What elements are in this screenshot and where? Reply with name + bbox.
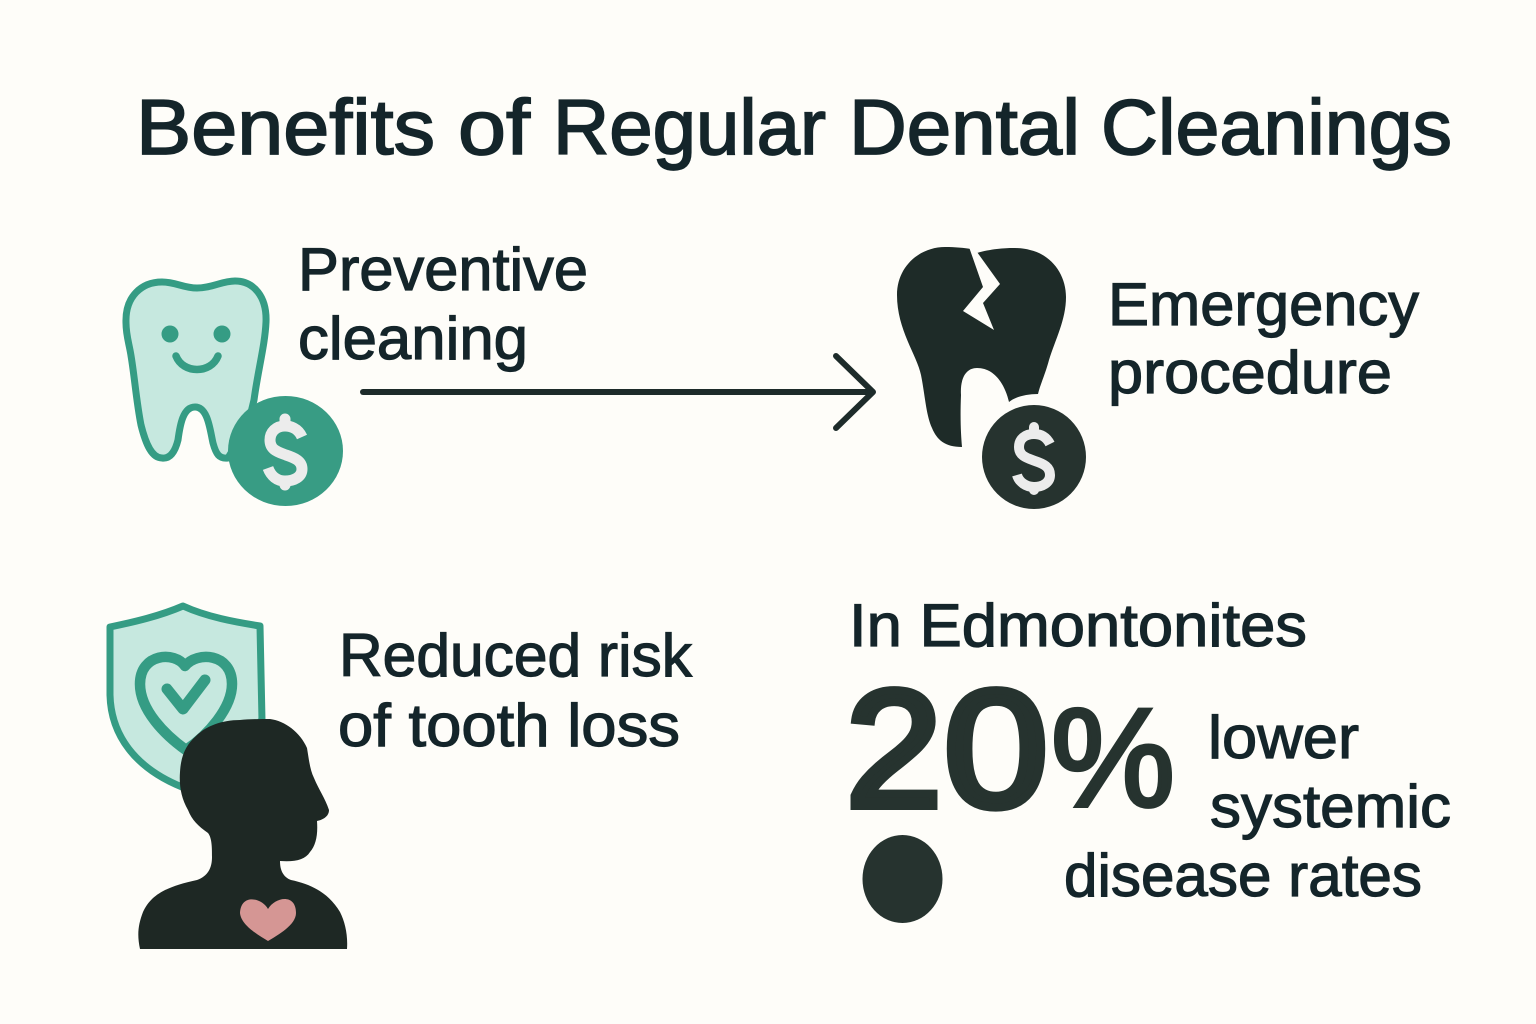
shield check mark — [167, 680, 205, 709]
person silhouette — [138, 719, 347, 949]
tooth outline — [126, 281, 266, 458]
icon: smiling tooth with dollar coin — [126, 281, 343, 506]
label: reduced risk of tooth loss — [338, 622, 693, 759]
icon: shield and person with heart — [110, 606, 347, 949]
panel: preventive cleaning — [126, 236, 588, 506]
dollar coin — [982, 405, 1086, 509]
label: lower systemic disease rates — [1064, 704, 1451, 909]
title — [136, 83, 1452, 171]
heading: In Edmontonites: In Edmontonites — [849, 592, 1307, 659]
title: Benefits — [136, 83, 435, 171]
panel: emergency procedure — [897, 247, 1419, 509]
statistic: 20%: 2 — [846, 657, 942, 842]
crack — [963, 247, 1000, 330]
dollar sign — [268, 419, 302, 485]
label: preventive cleaning — [298, 236, 588, 372]
label: reduced risk of tooth loss: of tooth loss — [338, 692, 680, 759]
tooth right eye — [214, 326, 230, 342]
dollar coin — [228, 396, 343, 506]
label: lower systemic disease rates: disease rates — [1064, 842, 1422, 909]
stray dot — [862, 835, 942, 923]
shield heart — [140, 657, 232, 750]
label: lower systemic disease rates: systemic — [1210, 773, 1451, 840]
statistic: 20% — [846, 657, 1175, 842]
tooth smile — [176, 356, 218, 370]
panel: reduced risk of tooth loss — [110, 606, 693, 949]
label: emergency procedure: Emergency — [1108, 271, 1419, 338]
title: of — [458, 83, 530, 171]
label: reduced risk of tooth loss: Reduced risk — [339, 622, 693, 689]
tooth left eye — [162, 326, 178, 342]
label: preventive cleaning: cleaning — [298, 305, 528, 372]
shield — [110, 606, 262, 787]
label: lower systemic disease rates: lower — [1208, 704, 1359, 771]
panel: Edmontonites statistic — [846, 592, 1451, 923]
label: preventive cleaning: Preventive — [298, 236, 588, 303]
dollar sign — [1017, 427, 1050, 490]
statistic: 20%: % — [1051, 679, 1175, 836]
cracked tooth — [897, 247, 1066, 447]
title: Dental — [849, 83, 1080, 171]
title: Cleanings — [1101, 83, 1452, 171]
arrow: preventive to emergency — [363, 356, 873, 428]
title: Regular — [553, 83, 826, 171]
statistic: 20%: 0 — [944, 657, 1048, 842]
label: emergency procedure: procedure — [1108, 339, 1392, 406]
icon: cracked tooth with dollar coin — [897, 247, 1086, 509]
heart — [240, 899, 296, 941]
label: emergency procedure — [1108, 271, 1419, 406]
